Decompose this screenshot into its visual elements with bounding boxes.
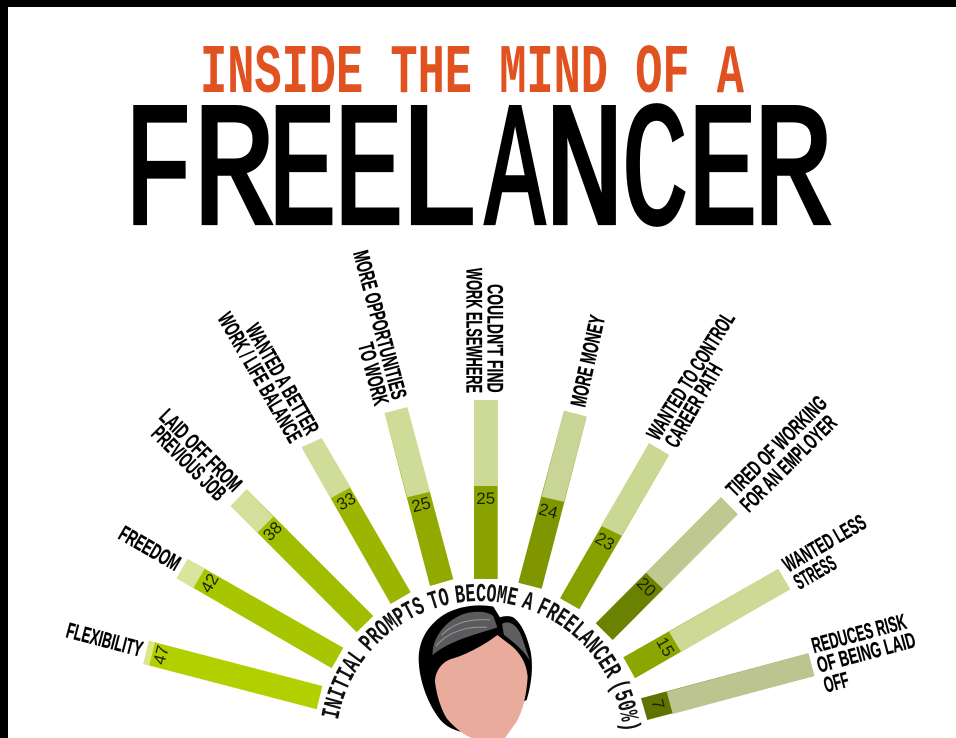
title: freelancer: E <box>688 77 758 276</box>
bar: wanted less stress 15 <box>623 509 870 678</box>
title: freelancer: C <box>621 77 689 277</box>
curved caption: INITIAL PROMPTS TO BECOME A FREELANCER (50%) <box>321 584 642 729</box>
title: freelancer: E <box>268 76 337 276</box>
icon: freelancer head <box>419 605 532 738</box>
bar: wanted a better work / life balance 33: WANTED A BETTER <box>241 319 324 439</box>
bar: wanted less stress 15: WANTED LESS <box>778 509 870 577</box>
bar: wanted a better work / life balance 33: WORK / LIFE BALANCE <box>213 308 307 447</box>
bar: more opportunities to work 25: MORE OPPORTUNITIES <box>348 248 412 402</box>
bar: more money 24: MORE MONEY <box>565 313 610 409</box>
title: freelancer <box>124 76 832 277</box>
title: freelancer: A <box>485 77 545 276</box>
bar: more opportunities to work 25 <box>348 248 453 586</box>
bar: wanted to control career path 23: CAREER PATH <box>659 359 728 452</box>
bar: laid off from previous job 38: PREVIOUS JOB <box>146 421 231 506</box>
bar: couldn't find work elsewhere 25: WORK ELSEWHERE <box>462 268 487 393</box>
bar: tired of working for an employer 20: FOR AN EMPLOYER <box>735 410 842 517</box>
bar: laid off from previous job 38 <box>146 404 373 632</box>
bar: reduces risk of being laid off 7: OFF <box>821 667 851 698</box>
hair <box>419 605 532 732</box>
bar: tired of working for an employer 20 <box>596 391 842 640</box>
hair highlights <box>433 612 530 661</box>
bar: tired of working for an employer 20: TIRED OF WORKING <box>721 391 832 502</box>
face <box>435 635 528 738</box>
title: freelancer: F <box>124 77 194 276</box>
bar: flexibility 47: 47 <box>150 644 173 667</box>
bar: wanted a better work / life balance 33 <box>213 308 411 604</box>
bar: flexibility 47 <box>64 618 322 709</box>
bar: reduces risk of being laid off 7 <box>641 609 918 720</box>
bar: couldn't find work elsewhere 25 <box>462 268 507 579</box>
bar: laid off from previous job 38: LAID OFF FROM <box>154 404 247 496</box>
title: freelancer: R <box>192 78 274 277</box>
bar: freedom 42 <box>114 521 343 668</box>
bar: freedom 42: 42 <box>197 570 223 596</box>
bar: wanted to control career path 23 <box>560 307 740 609</box>
bar: flexibility 47: FLEXIBILITY <box>64 618 146 662</box>
bar: wanted a better work / life balance 33: 33 <box>333 488 359 514</box>
bar: wanted to control career path 23: 23 <box>592 528 618 554</box>
bar: wanted to control career path 23: WANTED TO CONTROL <box>641 307 740 444</box>
bar: wanted less stress 15: 15 <box>652 634 678 660</box>
bar: more opportunities to work 25: TO WORK <box>353 340 394 408</box>
bar: laid off from previous job 38: 38 <box>259 518 286 545</box>
bar: couldn't find work elsewhere 25: 25 <box>476 489 495 508</box>
bar: reduces risk of being laid off 7: 7 <box>647 697 668 711</box>
bar: more money 24 <box>518 313 610 589</box>
bar: wanted less stress 15: STRESS <box>789 550 841 594</box>
bar: couldn't find work elsewhere 25: COULDN'T FIND <box>482 284 507 393</box>
bar: tired of working for an employer 20: 20 <box>633 574 660 600</box>
title: freelancer: L <box>396 77 480 276</box>
bar: freedom 42: FREEDOM <box>114 521 185 576</box>
bar: more money 24: 24 <box>537 500 560 523</box>
title: freelancer: N <box>544 77 625 277</box>
title: freelancer: E <box>334 77 404 276</box>
title: freelancer: R <box>753 76 832 276</box>
bar: more opportunities to work 25: 25 <box>410 493 433 516</box>
